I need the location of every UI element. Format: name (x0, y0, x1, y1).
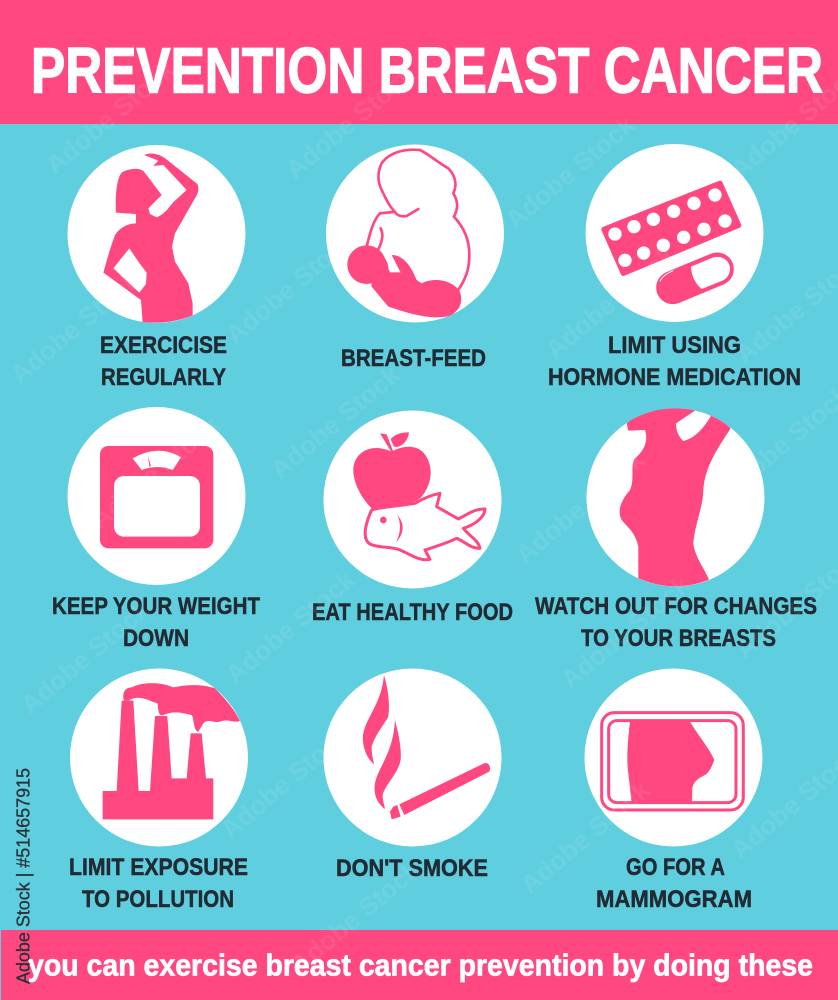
panel: watch out for changes (535, 405, 817, 652)
panel: go for a mammogram (584, 668, 762, 913)
watermarks: Adobe Stock (510, 444, 651, 570)
label: EXERCICISE (100, 332, 227, 359)
label: BREAST-FEED (341, 345, 486, 372)
icon: cigarette and smoke (363, 675, 490, 819)
panel: exercise regularly (68, 145, 246, 391)
icon: pill blister and capsule (604, 183, 739, 309)
label line 2: TO YOUR BREASTS (581, 625, 776, 652)
watermarks: Adobe Stock (40, 54, 181, 180)
panel: don't smoke (324, 668, 502, 882)
icon: apple and fish (353, 432, 485, 560)
stock watermark id: Adobe Stock | #514657915 (14, 768, 34, 984)
icon: mother nursing baby (347, 150, 469, 317)
label: EAT HEALTHY FOOD (312, 599, 513, 626)
footer banner (1, 930, 838, 1000)
watermarks: Adobe Stock (15, 594, 156, 720)
header banner (0, 0, 838, 124)
label: KEEP YOUR WEIGHT (52, 593, 260, 620)
panel: keep weight down (52, 407, 260, 652)
panel: breast-feed (326, 144, 504, 372)
icon: factory (103, 683, 240, 819)
label line 2: MAMMOGRAM (596, 886, 752, 913)
label: LIMIT USING (608, 332, 741, 359)
watermarks: Adobe Stock (5, 264, 146, 390)
panel: limit exposure to pollution (69, 668, 248, 913)
watermarks: Adobe Stock (555, 569, 696, 695)
icon: torso silhouette (620, 405, 731, 587)
label line 2: REGULARLY (101, 364, 226, 391)
watermarks: Adobe Stock (540, 239, 681, 365)
watermarks: Adobe Stock (280, 59, 421, 185)
label line 2: TO POLLUTION (82, 886, 234, 913)
label: LIMIT EXPOSURE (69, 854, 248, 881)
watermarks: Adobe Stock (215, 719, 356, 845)
watermarks: Adobe Stock (220, 564, 361, 690)
label line 2: HORMONE MEDICATION (548, 364, 801, 391)
watermarks: Adobe Stock (220, 224, 361, 350)
panel: eat healthy food (312, 410, 513, 626)
panel: limit hormone medication (548, 144, 801, 391)
icon: woman exercising (103, 153, 198, 323)
watermarks: Adobe Stock (85, 409, 226, 535)
label: GO FOR A (626, 854, 725, 881)
watermarks: Adobe Stock (265, 359, 406, 485)
label line 2: DOWN (123, 625, 189, 652)
watermarks: Adobe Stock (515, 774, 656, 900)
icon: mammogram screen (602, 713, 743, 810)
icon: weighing scale (100, 446, 213, 548)
label: DON'T SMOKE (336, 855, 488, 882)
watermarks: Adobe Stock (500, 109, 641, 235)
watermarks: Adobe Stock (285, 854, 426, 980)
